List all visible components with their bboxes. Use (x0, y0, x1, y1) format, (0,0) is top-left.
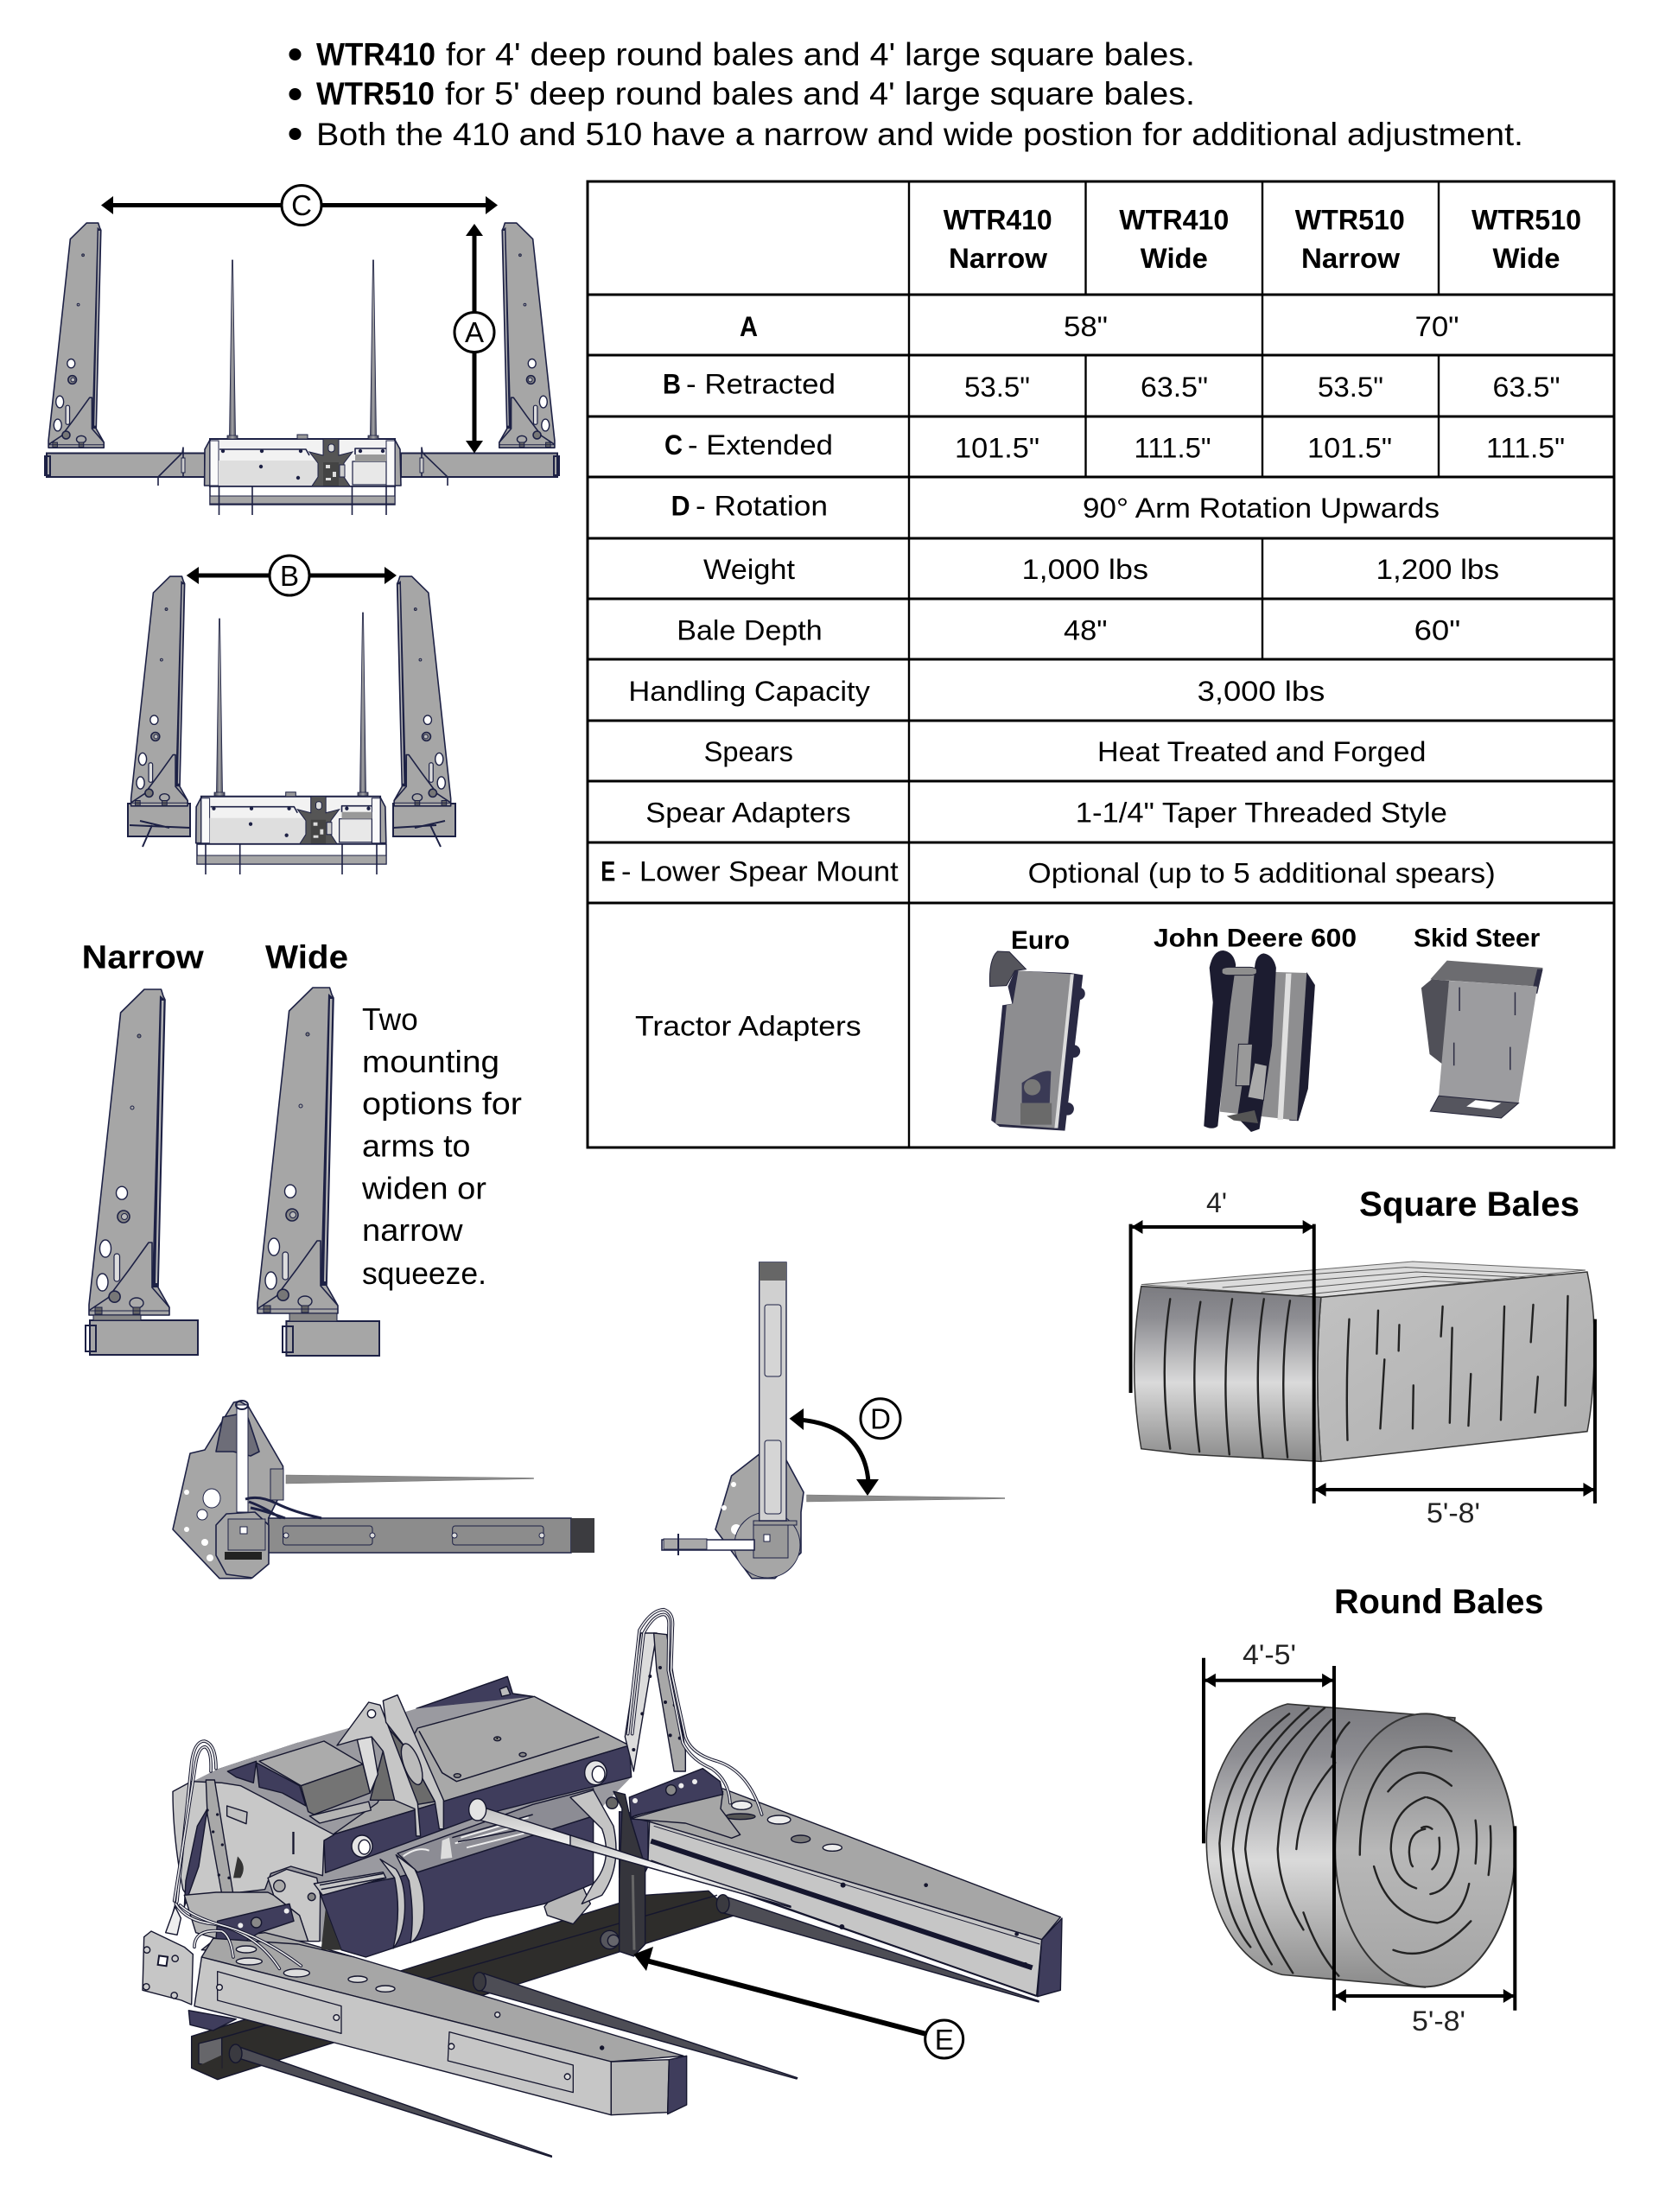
A-frame gusset (337, 1695, 443, 1836)
horizontal arm (268, 1518, 594, 1553)
row Weight (703, 554, 1499, 585)
row B: 63.5" (1493, 372, 1560, 403)
header row: Narrow (949, 243, 1047, 274)
row Weight: 1,000 lbs (1021, 554, 1148, 585)
arm mount bracket (184, 1869, 386, 1960)
square bale dimension lines (1131, 1220, 1595, 1503)
bullet: WTR410: for 4' deep round bales and 4' large square bales. (446, 36, 1195, 73)
label: round bale length: 5'-8' (1412, 2005, 1465, 2037)
left arm extended (48, 223, 104, 448)
bale face (1335, 1713, 1515, 1986)
retracted beam stubs (128, 804, 455, 847)
rear handle (662, 1534, 754, 1555)
heading: Narrow: Narrow (82, 940, 204, 976)
row C: - Extended (688, 429, 833, 461)
front arm (143, 1931, 687, 2115)
bale side face (1318, 1272, 1594, 1461)
table: specifications (588, 181, 1614, 1147)
tube over bracket (570, 1835, 791, 1907)
header row: Narrow (1301, 243, 1400, 274)
rear navy opening (227, 1761, 306, 1806)
heading: Square Bales: Square Bales (1359, 1185, 1580, 1224)
arm mount gusset (631, 1791, 741, 1838)
row Tractor Adapters: Euro (1011, 926, 1070, 955)
lower frame (210, 486, 395, 515)
dimension A arrow: A (465, 316, 484, 348)
bale barrel (1206, 1704, 1455, 1987)
lower beam (192, 1891, 734, 2080)
heading: Wide: Wide (265, 940, 348, 976)
dimension B arrow (187, 556, 397, 595)
round bale illustration (1204, 1658, 1515, 2011)
label: 4'-5': 4'-5' (1243, 1639, 1296, 1670)
vertical arm (760, 1262, 786, 1521)
narrow arm mount illustration (86, 989, 198, 1355)
row Tractor Adapters: John Deere 600 (1154, 925, 1357, 953)
row E: Optional (up to 5 additional spears) (1028, 858, 1496, 889)
row Bale Depth: 60" (1414, 615, 1460, 646)
header row: Wide (1493, 243, 1560, 274)
dimension C arrow (101, 185, 498, 225)
body backing silhouette (173, 1696, 632, 1957)
row E: - Lower Spear Mount (621, 855, 899, 887)
diagram: side view, arm lowered (173, 1401, 594, 1579)
E mount bracket (601, 1791, 645, 1956)
callout: dimension E arrow (633, 1947, 963, 2058)
bullet: WTR510: for 5' deep round bales and 4' large square bales. (445, 76, 1195, 111)
row Weight: 1,200 lbs (1376, 554, 1499, 585)
right upright (625, 1633, 685, 1771)
row A (740, 311, 1459, 342)
text: mounting options note: mounting (362, 1044, 499, 1079)
bullet: WTR510: WTR510 (316, 76, 435, 111)
dimension D arrow (790, 1408, 879, 1496)
center tube (469, 1799, 791, 1907)
dimension B arrow: B (280, 560, 299, 592)
row D: 90° Arm Rotation Upwards (1083, 493, 1440, 524)
drum bands (380, 1855, 424, 1948)
row D (671, 491, 1440, 524)
row Bale Depth: 48" (1064, 615, 1108, 646)
side plate (173, 1782, 334, 1918)
label: square bale length: 5'-8' (1427, 1497, 1480, 1529)
wide arm mount illustration (257, 988, 379, 1356)
row B: 63.5" (1141, 372, 1208, 403)
row Tractor Adapters: Tractor Adapters (635, 1011, 861, 1042)
row Handling Capacity: 3,000 lbs (1198, 676, 1325, 707)
row E (601, 855, 1496, 889)
header row: WTR410 (944, 205, 1052, 236)
row Spear Adapters (645, 798, 1447, 829)
diagram: extended top view with dimensions A and C (45, 185, 559, 515)
row Spears: Spears (704, 736, 793, 767)
row C: C (664, 429, 683, 461)
row Spear Adapters: Spear Adapters (645, 798, 851, 829)
housing box (259, 1741, 371, 1823)
dimension D label (861, 1399, 900, 1439)
row D: D (671, 491, 690, 522)
bearing collars (352, 1835, 372, 1857)
row Tractor Adapters (635, 925, 1543, 1132)
text: mounting options note: widen or (361, 1171, 486, 1206)
cable bay under crossbeam (397, 1789, 594, 1872)
mount plate raised (715, 1454, 804, 1579)
left hydraulic pipes (166, 1741, 301, 1968)
label: 4': 4' (1206, 1187, 1227, 1218)
header row (944, 205, 1581, 274)
row B (663, 369, 1560, 403)
header row: WTR410 (1119, 205, 1229, 236)
twine strands (1165, 1296, 1567, 1458)
text: mounting options note (361, 1001, 522, 1291)
right extension beam (401, 448, 559, 486)
row Handling Capacity: Handling Capacity (628, 676, 870, 707)
wrapper for right side parts (570, 1610, 1062, 1997)
bullet: WTR410: WTR410 (316, 36, 435, 73)
lower spears (229, 1895, 1039, 2157)
row Spears: Heat Treated and Forged (1097, 736, 1426, 767)
diagram: side view, arm rotated up with dimension D (662, 1262, 1005, 1579)
row Handling Capacity (628, 676, 1325, 707)
header row: WTR510 (1471, 205, 1581, 236)
square bale illustration (1131, 1220, 1595, 1503)
row A: A (740, 311, 758, 342)
heading: Round Bales: Round Bales (1334, 1583, 1543, 1621)
row D: - Rotation (696, 491, 828, 522)
spears retracted (214, 613, 368, 796)
round bale dimension lines (1204, 1658, 1515, 2011)
left upright (184, 1780, 236, 1912)
row C: 101.5" (1307, 432, 1392, 463)
row Tractor Adapters: Skid Steer (1414, 925, 1541, 953)
lower frame retracted (197, 844, 386, 874)
text: mounting options note: squeeze. (362, 1255, 486, 1291)
row B: B (663, 369, 681, 400)
row Spears (704, 736, 1426, 767)
row Bale Depth: Bale Depth (677, 615, 823, 646)
dimension A arrow (454, 224, 494, 453)
icon: Skid Steer adapter (1421, 961, 1543, 1118)
far disc behind mount (570, 1790, 648, 1904)
top deck (333, 1696, 629, 1834)
text: mounting options note: options for (362, 1086, 522, 1122)
arm mount bar (629, 1769, 723, 1817)
bale end face (1135, 1287, 1321, 1461)
header row: WTR510 (1295, 205, 1405, 236)
bale top (1141, 1262, 1586, 1297)
isometric view of bale spear assembly (143, 1610, 1062, 2157)
right arm extended (499, 223, 555, 448)
left extension beam (45, 448, 205, 486)
barrel strands (1219, 1708, 1350, 1976)
table grid (588, 181, 1614, 1147)
row Bale Depth (677, 615, 1460, 646)
icon: Euro adapter (989, 951, 1085, 1131)
right arm retracted (394, 576, 451, 806)
row E: E (601, 855, 615, 887)
text: mounting options note: arms to (362, 1128, 470, 1164)
header row: Wide (1141, 243, 1208, 274)
left arm retracted (131, 576, 188, 806)
mount plate (173, 1401, 321, 1579)
row C (664, 429, 1565, 463)
bullet list: model summary (289, 36, 1523, 152)
row A: 70" (1415, 311, 1459, 342)
bullet: both models: Both the 410 and 510 have a narrow and wide postion for additional adjustment. (316, 117, 1523, 152)
dimension D label: D (870, 1403, 891, 1434)
text: mounting options note: Two (362, 1001, 418, 1037)
dimension C arrow: C (291, 189, 312, 221)
spear raised (807, 1495, 1005, 1502)
callout: dimension E arrow: E (935, 2024, 954, 2056)
right hydraulic pipes (628, 1610, 762, 1815)
row B: 53.5" (1318, 372, 1383, 403)
central carriage (205, 435, 401, 490)
rear bearing collar (585, 1761, 607, 1785)
row B: 53.5" (964, 372, 1030, 403)
row C: 111.5" (1134, 432, 1211, 463)
right arm (631, 1789, 1062, 1997)
rear roller housing (218, 1676, 533, 1773)
spears (227, 260, 378, 439)
lower drum (320, 1816, 594, 1957)
row C: 111.5" (1486, 432, 1565, 463)
diagram: retracted top view with dimension B (128, 556, 455, 874)
far bearing bracket (544, 1878, 590, 1924)
row C: 101.5" (955, 432, 1039, 463)
face rings (1360, 1747, 1491, 1954)
spear lowered (286, 1475, 534, 1484)
row Spear Adapters: 1-1/4" Taper Threaded Style (1076, 798, 1447, 829)
row Weight: Weight (703, 554, 795, 585)
text: mounting options note: narrow (362, 1212, 464, 1248)
crossbeam (324, 1745, 632, 1872)
row A: 58" (1064, 311, 1108, 342)
icon: John Deere 600 adapter (1204, 950, 1315, 1132)
central carriage retracted (196, 792, 386, 848)
row B: - Retracted (686, 369, 836, 400)
